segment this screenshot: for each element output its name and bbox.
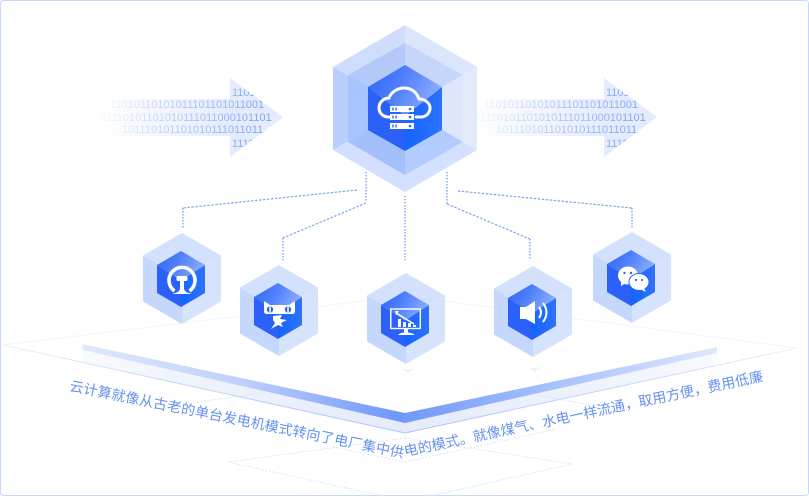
arrow: binary data flowing in: 101110101101010111011011 (122, 124, 263, 136)
arrow: binary data flowing out: 1101 (606, 87, 630, 99)
text: caption, right slope: 电的模式。就像煤气、水电一样流通，取用方便，费用低廉 (403, 368, 764, 459)
arrow: binary data flowing out (474, 78, 657, 157)
arrow: binary data flowing in: 1101 (232, 87, 256, 99)
central cloud server hexagon (333, 25, 477, 192)
icon: monitor with falling chart (391, 309, 420, 335)
text: caption, left slope: 云计算就像从古老的单台发电机模式转向了电厂集中供 (68, 378, 406, 461)
icon: tmall cat (264, 301, 295, 329)
icon: wechat bubbles (618, 266, 649, 292)
arrow: binary data flowing in: 1111 (232, 138, 254, 150)
arrow: binary data flowing in: 11010110101011101101011001 (110, 99, 264, 111)
arrow: binary data flowing out: 01110101101010111011000101101 (474, 112, 646, 124)
hexagon: speaker (494, 266, 572, 357)
icon: speaker (520, 301, 546, 324)
dashed connectors (183, 172, 632, 260)
hexagon: wechat (593, 232, 671, 323)
arrow: binary data flowing out: 1111 (606, 138, 628, 150)
arrow: binary data flowing in (100, 78, 283, 157)
icon: cloud with servers (379, 88, 430, 129)
hexagon: monitor (367, 273, 445, 364)
arrow: binary data flowing in: 01110101101010111011000101101 (100, 112, 272, 124)
platform: layered base (3, 296, 797, 496)
hexagon: tmall (240, 265, 318, 356)
arrow: binary data flowing out: 101110101101010111011011 (496, 124, 637, 136)
icon: railway logo (169, 267, 195, 294)
arrow: binary data flowing out: 11010110101011101101011001 (484, 99, 638, 111)
hexagon: railway (143, 233, 221, 324)
